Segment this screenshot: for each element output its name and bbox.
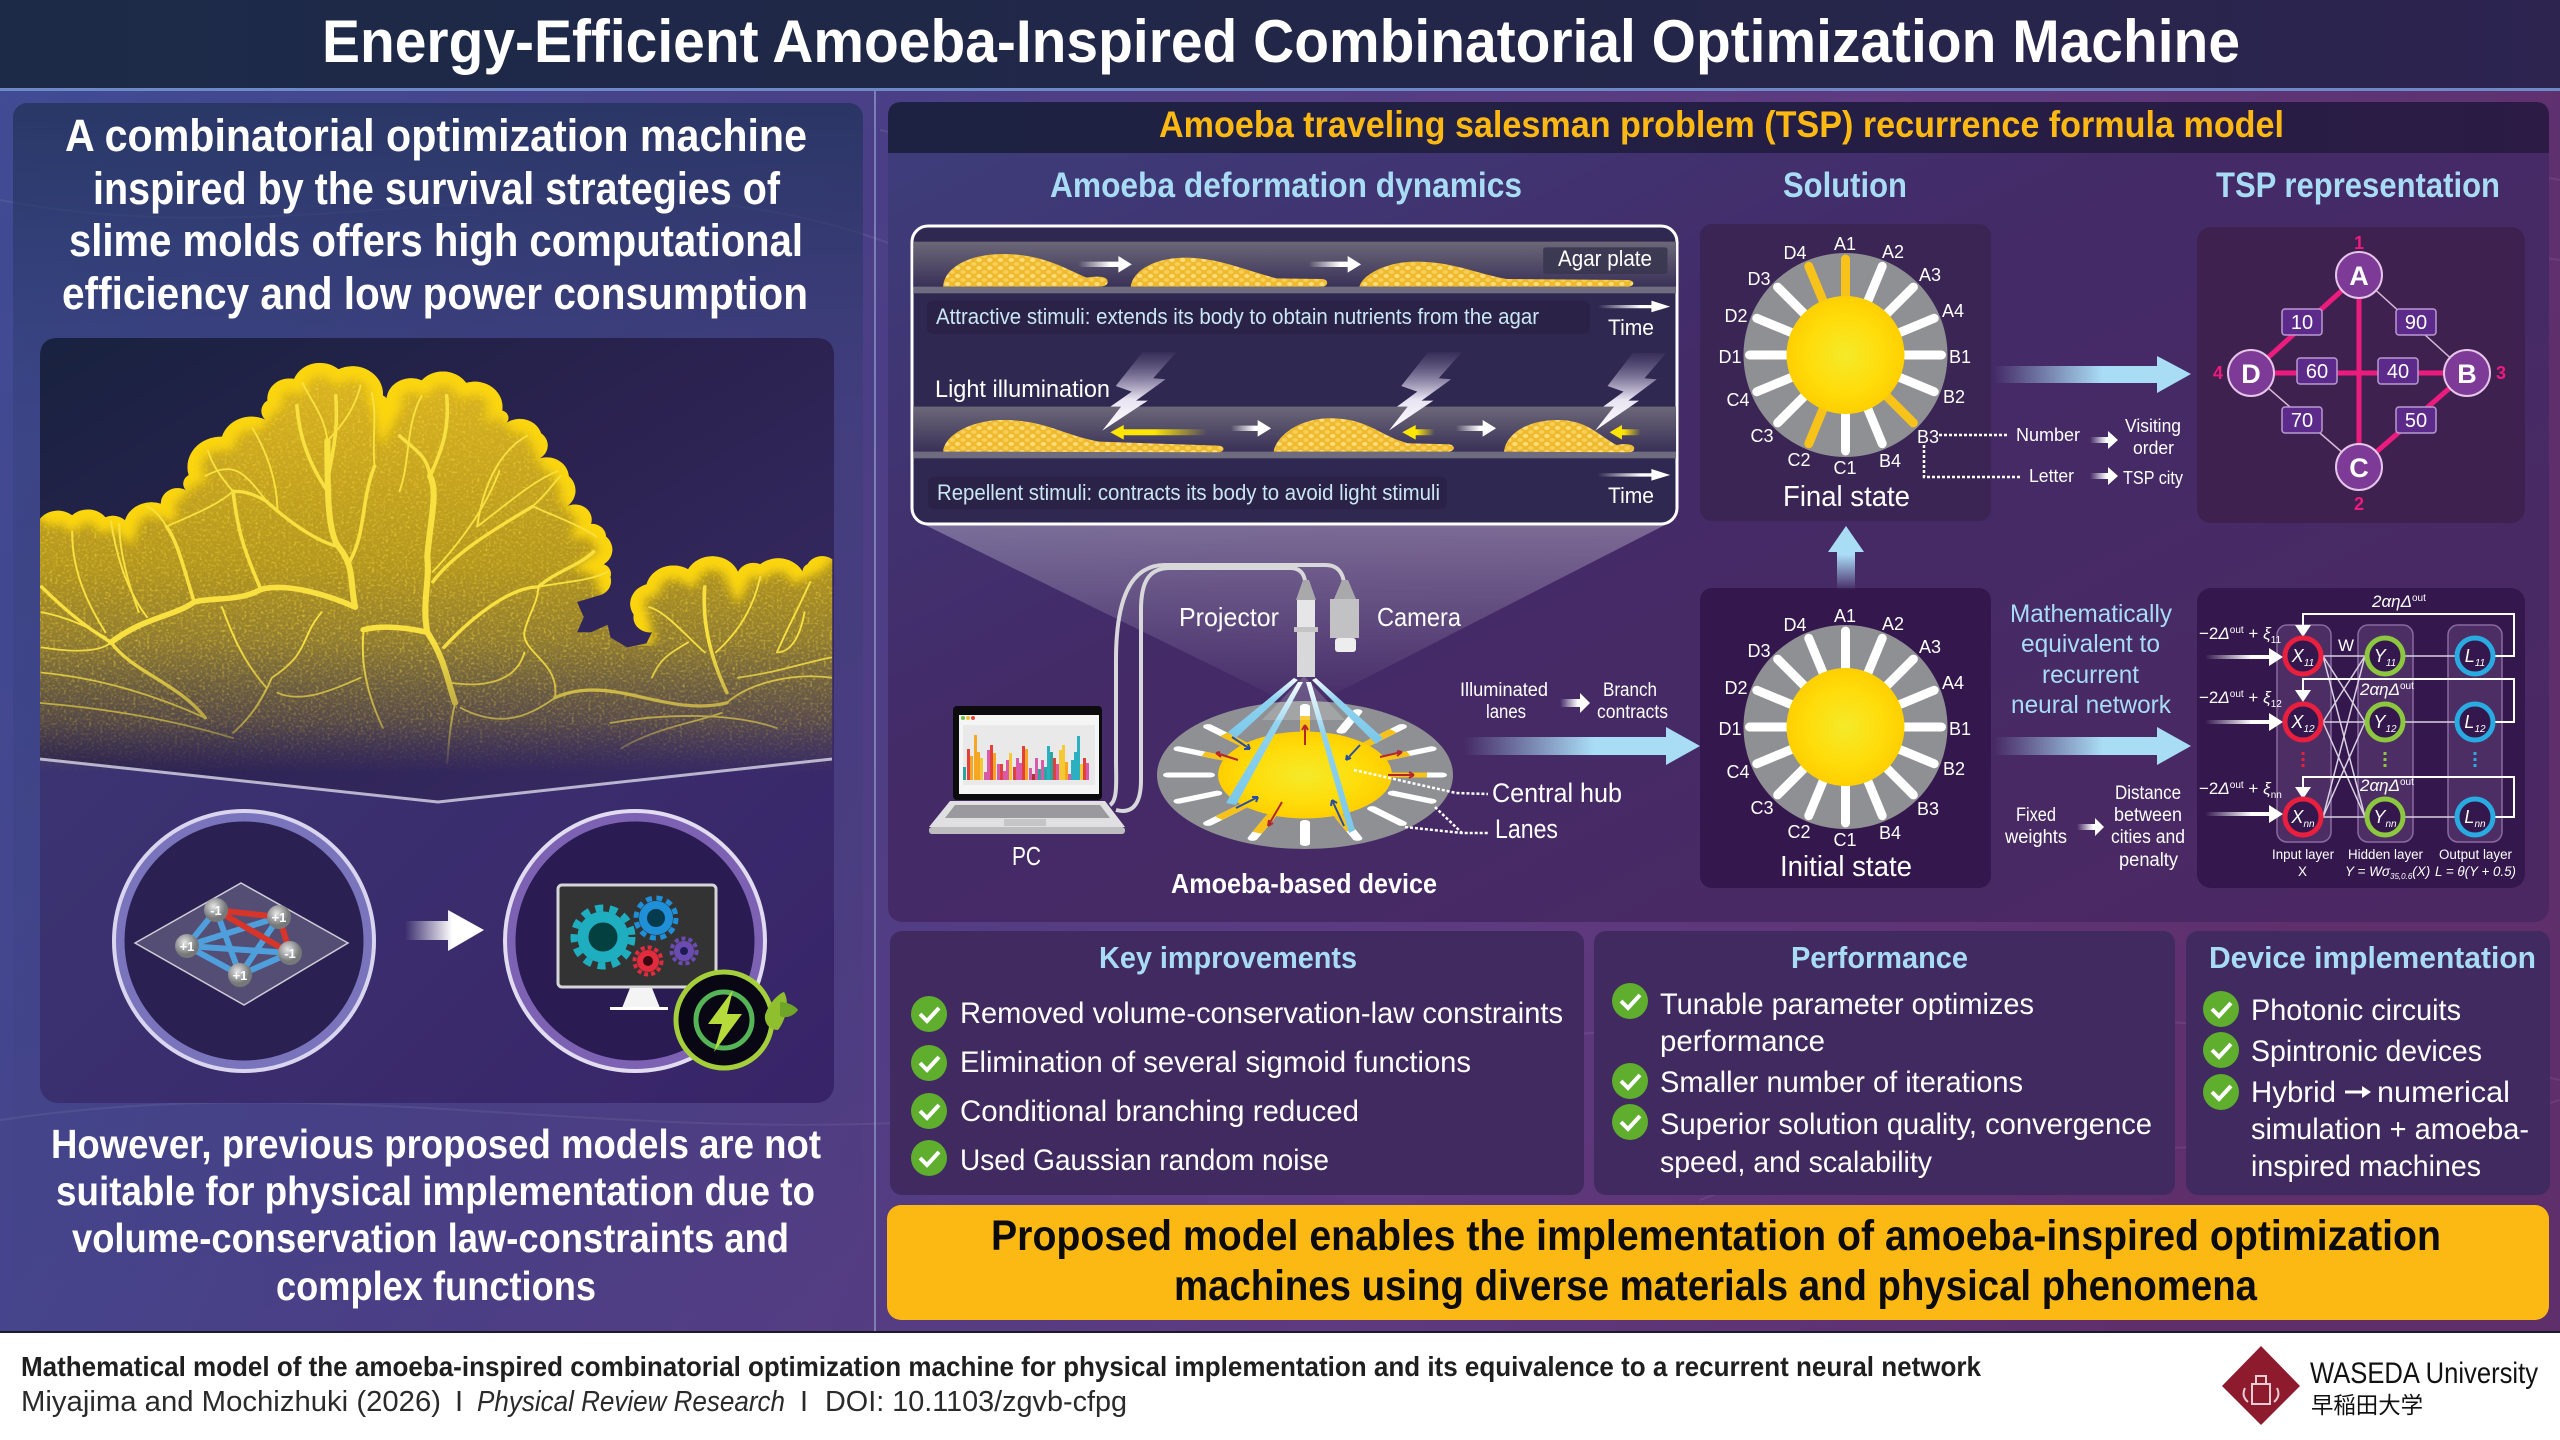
citation: Physical Review Research (477, 1386, 785, 1418)
weights: 70 (2291, 410, 2313, 432)
number letter legend: TSP city (2123, 468, 2183, 488)
feedback loops (2303, 614, 2514, 817)
connections (2323, 656, 2455, 817)
panel: performance (1594, 931, 2175, 1195)
panel: recurrent neural network: L (2465, 646, 2475, 666)
ellipsis dots (2303, 752, 2475, 767)
panel: TSP graph: 1 (2354, 233, 2364, 253)
panel: device implementation: Photonic circuits (2251, 994, 2461, 1027)
labels (935, 246, 1654, 508)
panel: TSP graph: D (2241, 359, 2261, 389)
panel: recurrent neural network: Y (2373, 807, 2385, 827)
lane labels: D1 (1718, 347, 1742, 367)
lane labels: B3 (1917, 427, 1939, 447)
panel: TSP graph: 3 (2496, 363, 2506, 383)
panel: recurrent neural network: 12 (2385, 724, 2397, 735)
light beam from box to device (925, 525, 1665, 710)
labels: hub lanes device: Amoeba-based device (1171, 868, 1437, 899)
panel: key improvements (890, 931, 1584, 1195)
time arrows (1598, 301, 1670, 481)
arrows: time steps (1078, 256, 1496, 437)
text: fixed weights: penalty (2119, 850, 2178, 871)
citation: I (455, 1386, 463, 1418)
weights: 90 (2405, 312, 2427, 334)
lane labels: C2 (1787, 450, 1811, 470)
panel: amoeba deformation dynamics: Repellent stimuli: contracts its body to avoid light stimuli (937, 480, 1440, 505)
lane labels (1718, 234, 1971, 478)
lane labels: C1 (1833, 458, 1857, 478)
panel: TSP graph: 2 (2354, 494, 2364, 514)
formula labels: nn (2271, 790, 2282, 801)
lane labels: A4 (1942, 301, 1964, 321)
panel: amoeba deformation dynamics (912, 226, 1677, 524)
icon: projector (1294, 580, 1318, 677)
panel: device implementation (2186, 931, 2550, 1195)
lane labels: D1 (1718, 719, 1742, 739)
lane labels (1718, 606, 1971, 850)
lane labels: C3 (1750, 426, 1774, 446)
device flow arrows (1216, 725, 1414, 826)
labels: Agar plate (1558, 246, 1652, 271)
icon: ising network circle: +1 (272, 910, 286, 925)
lane labels: B4 (1879, 451, 1901, 471)
panel: recurrent neural network: X (2291, 712, 2303, 732)
left bottom text: complex functions (276, 1263, 596, 1309)
lane labels: C4 (1726, 390, 1750, 410)
layer captions: Input layer (2272, 847, 2334, 862)
title bar: Energy-Efficient Amoeba-Inspired Combinatorial Optimization Machine (322, 8, 2240, 75)
number letter legend: Letter (2029, 466, 2074, 486)
layer captions: Output layer (2439, 847, 2512, 862)
panel: recurrent neural network: 11 (2475, 658, 2485, 669)
panel: device implementation: Spintronic devices (2251, 1035, 2482, 1068)
labels: Time (1608, 483, 1654, 508)
panel: final state: Final state (1783, 481, 1910, 513)
panel: performance: Superior solution quality, convergence (1660, 1108, 2152, 1141)
panel: key improvements: Elimination of several sigmoid functions (960, 1046, 1471, 1079)
text: fixed weights: between (2114, 805, 2182, 826)
text: fixed weights: cities and (2111, 827, 2185, 848)
text: mathematically equivalent: recurrent (2042, 661, 2139, 689)
arrows: yellow contraction (1110, 425, 1641, 440)
lane labels: D4 (1783, 243, 1807, 263)
panel: recurrent neural network: nn (2303, 819, 2315, 830)
input arrows (2205, 648, 2283, 823)
formula labels: + (2244, 779, 2263, 798)
panel: key improvements: Removed volume-conservation-law constraints (960, 997, 1563, 1030)
check icons (1612, 983, 1648, 1140)
formula labels: + (2244, 624, 2263, 643)
device light beams (1226, 676, 1383, 833)
lane labels: A1 (1834, 234, 1856, 254)
icon: efficient computer circle (505, 811, 798, 1071)
lane labels: D2 (1724, 678, 1748, 698)
panel: recurrent neural network: Y (2374, 646, 2386, 666)
citation (21, 1386, 1127, 1418)
subheadings: TSP representation (2216, 166, 2500, 205)
footer (0, 1331, 2560, 1440)
slime mold (39, 363, 833, 773)
text: fixed weights (2004, 783, 2185, 871)
left bottom text (51, 1121, 821, 1309)
icon: ising network circle: -1 (210, 903, 222, 918)
formula labels: −2Δ (2199, 688, 2230, 707)
panel: recurrent neural network: 12 (2303, 724, 2315, 735)
number letter legend: Number (2016, 425, 2080, 445)
bar chart (963, 735, 1089, 780)
labels: Time (1608, 315, 1654, 340)
icon: ising network circle: +1 (180, 939, 194, 954)
lane labels: B1 (1949, 347, 1971, 367)
formula labels: ξ (2263, 624, 2272, 643)
arrow: left circle to right circle (405, 910, 484, 951)
panel: TSP graph: B (2457, 359, 2477, 389)
wheel (1744, 625, 1948, 829)
panel: recurrent neural network: 11 (2386, 658, 2396, 669)
panel: key improvements: Key improvements (1099, 940, 1357, 975)
pills (927, 301, 1590, 334)
check icons (911, 996, 947, 1176)
panel: TSP recurrence model (888, 102, 2549, 922)
lane labels: C4 (1726, 762, 1750, 782)
note: illuminated lanes: contracts (1597, 702, 1668, 723)
formula labels: ξ (2263, 779, 2272, 798)
icon: camera (1330, 580, 1359, 652)
icon: laptop (929, 706, 1125, 834)
icon: amoeba-based device (1157, 701, 1453, 849)
panel: TSP graph: 4 (2213, 363, 2223, 383)
formula labels: out (2230, 780, 2244, 791)
heading band: Amoeba traveling salesman problem (TSP) recurrence formula model (1159, 104, 2284, 145)
label: PC: PC (1012, 841, 1041, 871)
lane labels: B4 (1879, 823, 1901, 843)
subheadings: Solution (1783, 166, 1907, 205)
cities (2228, 252, 2490, 490)
panel: device implementation: Device implementation (2209, 940, 2536, 975)
panel: key improvements: Used Gaussian random noise (960, 1144, 1329, 1177)
lane labels: A3 (1919, 637, 1941, 657)
labels: projector camera (1179, 602, 1461, 632)
formula labels: 2αηΔ (2360, 776, 2400, 795)
panel: performance: speed, and scalability (1660, 1146, 1932, 1179)
icon: cables (1110, 565, 1345, 811)
formula labels: 11 (2271, 635, 2282, 646)
note: illuminated lanes: Illuminated (1460, 680, 1548, 701)
panel: initial state (1700, 588, 1991, 888)
labels: hub lanes device (1171, 778, 1622, 899)
number letter legend: order (2133, 438, 2174, 458)
panel: recurrent neural network: X (2291, 807, 2303, 827)
lane labels: B3 (1917, 799, 1939, 819)
subheadings: Amoeba deformation dynamics (1050, 166, 1522, 205)
amoebas attractive (943, 254, 1633, 287)
title bar (0, 0, 2560, 91)
formula labels: W (2338, 636, 2354, 655)
panel: recurrent neural network: 11 (2304, 658, 2314, 669)
formula labels: −2Δ (2199, 779, 2230, 798)
panel: device implementation: inspired machines (2251, 1150, 2481, 1183)
lane labels: C1 (1833, 830, 1857, 850)
weights: 50 (2405, 410, 2427, 432)
layer captions: Y = Wσ (2345, 864, 2390, 879)
panel: TSP graph: A (2349, 261, 2369, 291)
lane labels: A4 (1942, 673, 1964, 693)
layer captions: X (2298, 864, 2307, 879)
panel: recurrent neural network (2197, 588, 2525, 888)
labels: projector camera: Projector (1179, 602, 1279, 632)
left bottom text: However, previous proposed models are not (51, 1121, 821, 1167)
panel: device implementation: simulation + amoeba- (2251, 1113, 2529, 1146)
lane labels: C3 (1750, 798, 1774, 818)
panel: amoeba deformation dynamics: Attractive stimuli: extends its body to obtain nutrients from the agar (936, 304, 1539, 329)
weights (2282, 309, 2436, 433)
icon: ising network circle: -1 (284, 946, 296, 961)
panel: final state (1700, 224, 1991, 521)
arrow: initial state to network (1994, 727, 2191, 765)
callout: conclusion: Proposed model enables the implementation of amoeba-inspired optimization (991, 1212, 2441, 1260)
lane labels: A2 (1882, 242, 1904, 262)
panel: recurrent neural network: Y (2373, 712, 2385, 732)
note: illuminated lanes: Branch (1603, 680, 1657, 701)
weights: 60 (2306, 361, 2328, 383)
panel: TSP graph: C (2349, 453, 2369, 483)
panel: recurrent neural network: X (2292, 646, 2304, 666)
citation: I (800, 1386, 808, 1418)
labels: Light illumination (935, 376, 1110, 403)
citation: DOI: 10.1103/zgvb-cfpg (825, 1386, 1127, 1418)
arrow: device to initial state (1464, 727, 1700, 765)
panel: performance: Tunable parameter optimizes (1660, 988, 2034, 1021)
labels: hub lanes device: Central hub (1492, 778, 1622, 808)
labels: hub lanes device: Lanes (1495, 814, 1558, 844)
chevron (40, 759, 832, 802)
text: fixed weights: Distance (2115, 783, 2181, 804)
left intro text (62, 110, 808, 319)
panel: performance: performance (1660, 1025, 1825, 1058)
callout: conclusion (887, 1205, 2549, 1320)
left intro text: inspired by the survival strategies of (93, 163, 781, 214)
text: mathematically equivalent: neural network (2011, 691, 2171, 719)
panel: device implementation: numerical (2377, 1076, 2510, 1109)
lane labels: B1 (1949, 719, 1971, 739)
icon: ising network circle (114, 811, 374, 1071)
lane labels: A3 (1919, 265, 1941, 285)
wheel (1744, 253, 1948, 457)
lane labels: A2 (1882, 614, 1904, 634)
panel: performance: Smaller number of iterations (1660, 1066, 2023, 1099)
panel: left column background (13, 103, 863, 1328)
formula labels: out (2412, 593, 2426, 604)
labels: projector camera: Camera (1377, 602, 1461, 632)
arrow: final state to TSP (1994, 356, 2191, 393)
formula labels: out (2230, 689, 2244, 700)
dotted leader lines (1354, 770, 1488, 833)
check icons (2203, 991, 2239, 1110)
left bottom text: volume-conservation law-constraints and (72, 1215, 789, 1261)
text: mathematically equivalent: Mathematically (2010, 600, 2172, 628)
lane labels: D3 (1747, 269, 1771, 289)
weights: 40 (2387, 361, 2409, 383)
lane labels: A1 (1834, 606, 1856, 626)
lane labels: C2 (1787, 822, 1811, 842)
callout: conclusion: machines using diverse materials and physical phenomena (1174, 1262, 2258, 1310)
formula labels: −2Δ (2199, 624, 2230, 643)
lane labels: D4 (1783, 615, 1807, 635)
logo: Waseda University (2222, 1346, 2538, 1425)
lane labels: D2 (1724, 306, 1748, 326)
number letter legend: Visiting (2125, 416, 2181, 436)
panel: recurrent neural network: 12 (2474, 724, 2486, 735)
subheadings (1050, 166, 2500, 205)
text: fixed weights: Fixed (2016, 805, 2056, 826)
formula labels (2199, 592, 2426, 801)
panel: recurrent neural network: L (2464, 807, 2474, 827)
paper title: Mathematical model of the amoeba-inspired combinatorial optimization machine for physical implementation and its equivalence to a recurrent neural network (21, 1351, 1981, 1382)
text: fixed weights: weights (2004, 827, 2067, 848)
formula labels: out (2230, 625, 2244, 636)
text: mathematically equivalent: equivalent to (2021, 630, 2160, 658)
panel: TSP graph (2197, 227, 2525, 523)
formula labels: + (2244, 688, 2263, 707)
number letter legend (1924, 416, 2183, 488)
panel: initial state: Initial state (1780, 851, 1912, 883)
icon: energy badge (676, 972, 798, 1068)
formula labels: out (2400, 777, 2414, 788)
panel: performance: Performance (1791, 940, 1968, 975)
panel: device implementation: Hybrid (2251, 1076, 2336, 1109)
text: mathematically equivalent (2010, 600, 2172, 719)
formula labels: ξ (2263, 688, 2272, 707)
logo: Waseda University: 早稲田大学 (2311, 1392, 2423, 1418)
nodes (2285, 638, 2493, 835)
icon: ising network circle: +1 (233, 968, 247, 983)
panel: slime mold illustration (39, 338, 834, 1103)
panel: key improvements: Conditional branching reduced (960, 1095, 1359, 1128)
icons: lightning (1102, 352, 1666, 431)
formula labels: 2αηΔ (2360, 680, 2400, 699)
heading band (888, 102, 2549, 153)
layer captions: L = θ(Y + 0.5) (2435, 864, 2516, 879)
left bottom text: suitable for physical implementation due to (56, 1168, 815, 1214)
panel: recurrent neural network: nn (2385, 819, 2397, 830)
note: illuminated lanes: lanes (1486, 702, 1526, 723)
layer captions: Hidden layer (2348, 847, 2423, 862)
amoebas repellent (943, 418, 1634, 452)
citation: Miyajima and Mochizhuki (2026) (21, 1386, 441, 1418)
panel: recurrent neural network: nn (2474, 819, 2486, 830)
left intro text: A combinatorial optimization machine (65, 110, 807, 161)
left intro text: slime molds offers high computational (69, 215, 803, 266)
layer captions: 35,0.6 (2390, 872, 2413, 881)
layer captions (2272, 847, 2516, 881)
left intro text: efficiency and low power consumption (62, 268, 808, 319)
panel: recurrent neural network: L (2464, 712, 2474, 732)
note: illuminated lanes (1460, 680, 1668, 723)
lane labels: B2 (1943, 387, 1965, 407)
formula labels: 12 (2271, 699, 2282, 710)
formula labels: out (2400, 681, 2414, 692)
weights: 10 (2291, 312, 2313, 334)
lane labels: D3 (1747, 641, 1771, 661)
formula labels: 2αηΔ (2372, 592, 2412, 611)
arrow: initial to final (1828, 526, 1864, 590)
lane labels: B2 (1943, 759, 1965, 779)
layer captions: (X) (2412, 864, 2430, 879)
